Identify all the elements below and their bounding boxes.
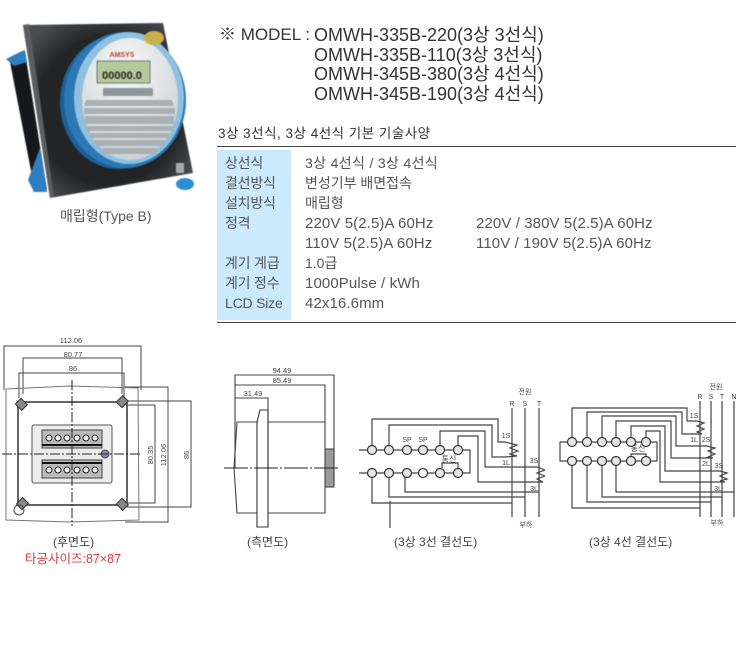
3-phase 4-wire caption: (3상 4선 결선도) (589, 535, 672, 549)
spec values: 매립형 (305, 195, 344, 211)
3-phase 3-wire wiring diagram: 통신 (442, 455, 456, 464)
3-phase 4-wire wiring diagram: 3L (714, 486, 722, 493)
3-phase 3-wire wiring diagram: S (523, 401, 528, 408)
3-phase 4-wire wiring diagram: S (709, 394, 714, 401)
spec values: 변성기부 배면접속 (305, 175, 412, 191)
spec labels (225, 155, 283, 311)
model line 3: OMWH-345B-380(3상 4선식) (314, 64, 544, 84)
rear view drawing: 86 (182, 451, 191, 459)
side view drawing: 85.49 (273, 376, 291, 385)
3-phase 4-wire wiring diagram: 통신 (631, 444, 645, 453)
3-phase 3-wire wiring diagram: SP (418, 437, 428, 444)
3-phase 4-wire wiring diagram: T (720, 394, 725, 401)
3-phase 4-wire wiring diagram: 1L (690, 437, 698, 444)
3-phase 4-wire wiring diagram: 2L (702, 461, 710, 468)
3-phase 3-wire wiring diagram: 전원 (519, 387, 531, 396)
side view drawing (224, 366, 338, 528)
3-phase 4-wire wiring diagram: 전원 (710, 382, 722, 391)
spec values: 3상 4선식 / 3상 4선식 (305, 155, 438, 171)
3-phase 3-wire wiring diagram: 1L (502, 460, 510, 467)
spec values: 42x16.6mm (305, 295, 384, 312)
product photo: meter (6, 22, 195, 199)
model label: ※ MODEL : (219, 25, 310, 44)
3-phase 4-wire wiring diagram: 부하 (711, 518, 724, 527)
model line 1: OMWH-335B-220(3상 3선식) (314, 25, 544, 45)
spec table (217, 146, 736, 323)
spec labels: 계기 계급 (225, 255, 279, 271)
spec labels: 결선방식 (225, 175, 276, 191)
side view caption: (측면도) (247, 535, 288, 549)
spec values: 1000Pulse / kWh (305, 275, 420, 292)
rear view drawing: 80.35 (146, 446, 155, 464)
3-phase 4-wire wiring diagram: R (697, 394, 703, 401)
3-phase 4-wire wiring diagram: 2S (702, 437, 711, 444)
product photo: meter: AMSYS (110, 52, 135, 59)
spec labels: 설치방식 (225, 195, 276, 211)
rear view drawing: 86 (69, 364, 77, 373)
label column background (217, 150, 291, 320)
3-phase 3-wire wiring diagram: R (509, 401, 515, 408)
3-phase 3-wire wiring diagram: 1S (502, 433, 511, 440)
rated values second column: 220V / 380V 5(2.5)A 60Hz (476, 215, 653, 232)
rear view drawing: 112.06 (159, 444, 168, 466)
spec values: 1.0급 (305, 255, 337, 271)
3-phase 3-wire caption: (3상 3선 결선도) (394, 535, 477, 549)
3-phase 3-wire wiring diagram: 부하 (520, 520, 533, 529)
model line 2: OMWH-335B-110(3상 3선식) (314, 45, 542, 65)
spec labels: LCD Size (225, 295, 283, 311)
spec values: 110V 5(2.5)A 60Hz (305, 235, 432, 252)
caption: flush type B: 매립형(Type B) (60, 208, 152, 224)
product photo: meter: 00000.0 (102, 70, 142, 82)
spec values: 220V 5(2.5)A 60Hz (305, 215, 433, 232)
rear view drawing: 112.06 (60, 336, 82, 345)
rated values second column: 110V / 190V 5(2.5)A 60Hz (476, 235, 652, 252)
rear view drawing: 80.77 (64, 350, 82, 359)
spec heading: 3상 3선식, 3상 4선식 기본 기술사양 (218, 126, 431, 141)
3-phase 3-wire wiring diagram: SP (402, 437, 412, 444)
rear view caption: (후면도) (53, 535, 94, 549)
side view drawing: 31.49 (244, 389, 262, 398)
3-phase 4-wire wiring diagram (559, 382, 737, 527)
3-phase 4-wire wiring diagram: N (731, 394, 737, 401)
3-phase 3-wire wiring diagram: 3L (530, 486, 538, 493)
3-phase 3-wire wiring diagram: 3S (530, 458, 539, 465)
3-phase 3-wire wiring diagram (359, 387, 545, 529)
3-phase 4-wire wiring diagram: 3S (715, 463, 724, 470)
spec labels: 상선식 (225, 155, 263, 171)
model line 4: OMWH-345B-190(3상 4선식) (314, 84, 544, 104)
rated values second column (476, 215, 653, 252)
spec values (305, 155, 438, 312)
rear view drawing (2, 336, 192, 526)
spec labels: 계기 정수 (225, 275, 279, 291)
model list (219, 25, 544, 104)
spec labels: 정격 (225, 215, 250, 231)
side view drawing: 94.49 (273, 366, 291, 375)
3-phase 3-wire wiring diagram: T (537, 401, 542, 408)
cutout size note: 타공사이즈:87×87 (25, 552, 121, 566)
3-phase 4-wire wiring diagram: 1S (690, 413, 699, 420)
